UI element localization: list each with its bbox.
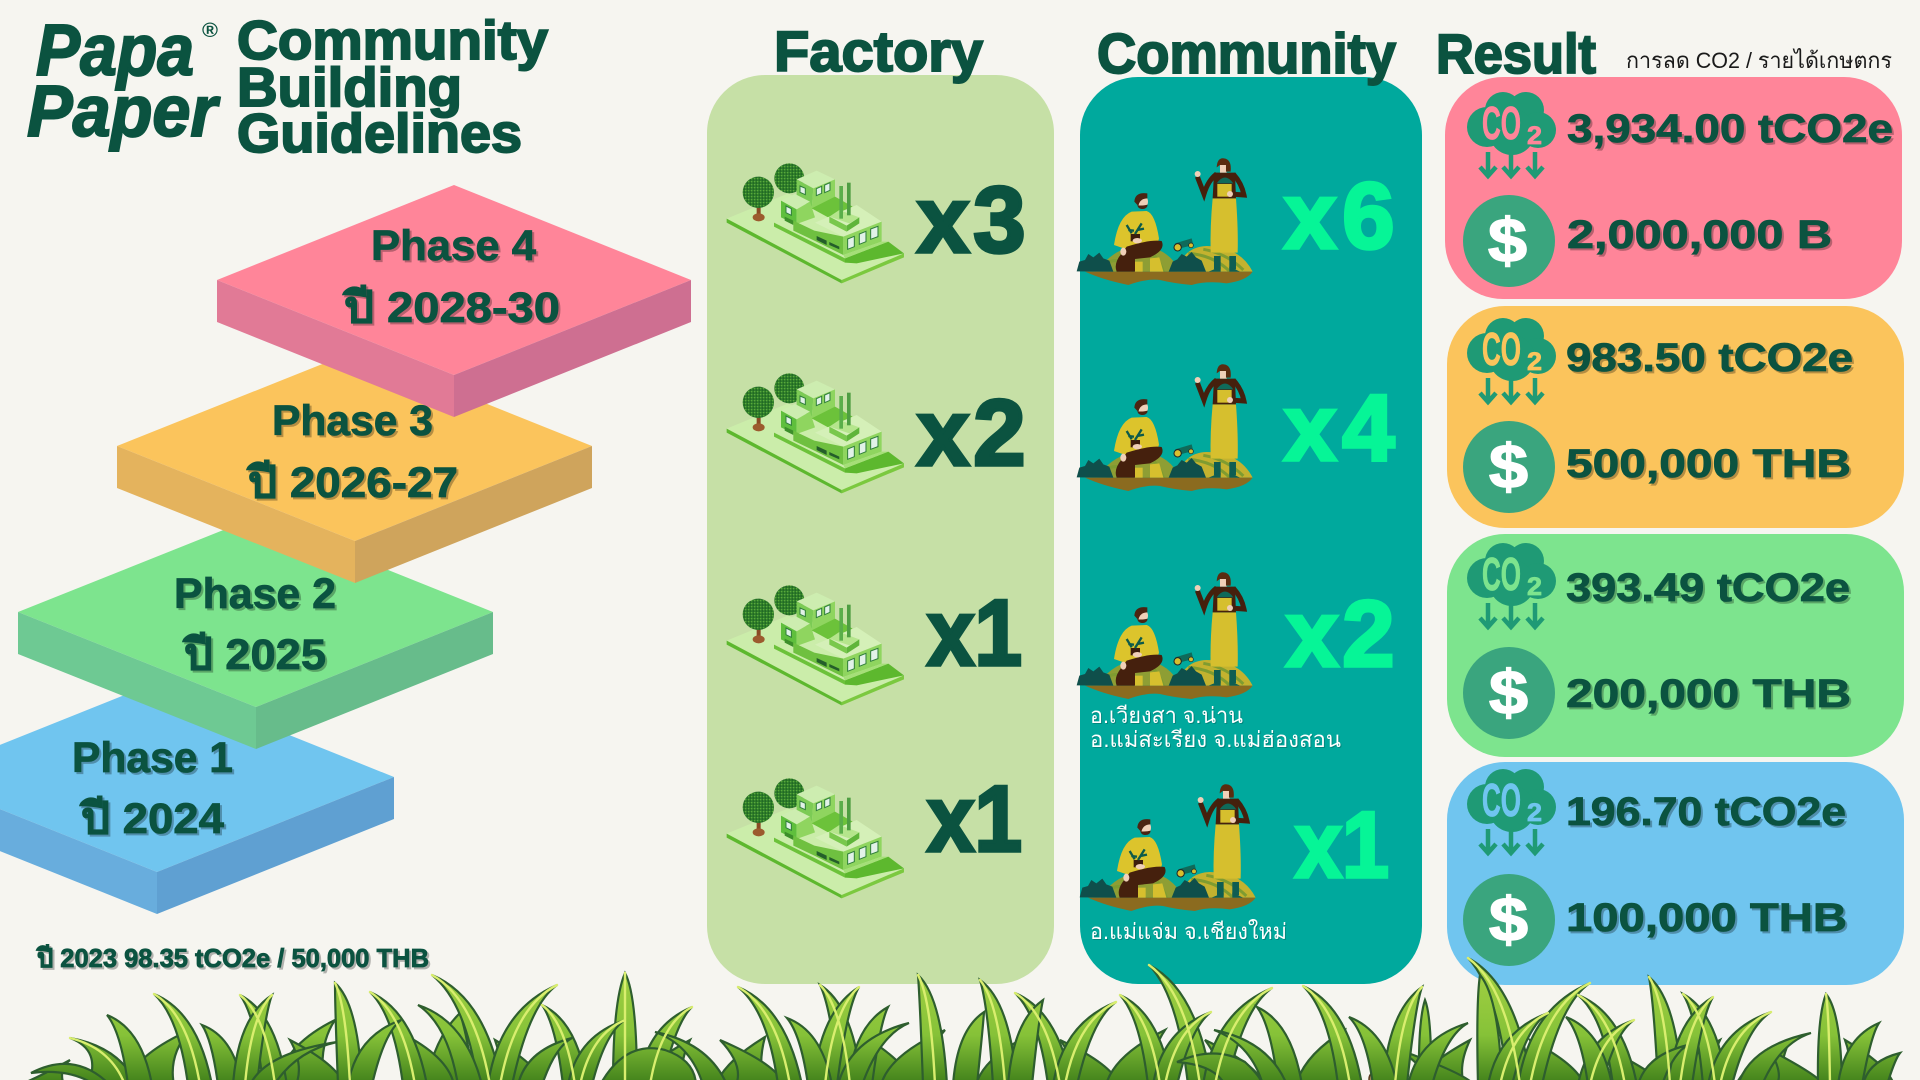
panel: factory [707, 75, 1054, 984]
icon: dollar coin: $ [1489, 886, 1528, 955]
logo: Papa Paper [27, 11, 221, 152]
community multiplier x2: x2 [1286, 581, 1399, 686]
location label row 4: อ.แม่แจ่ม จ.เชียงใหม่ [1090, 919, 1287, 944]
phase 1 label: ปี 2024 [79, 795, 224, 843]
icon: dollar coin: $ [1489, 659, 1528, 728]
phase 1 label [72, 734, 233, 843]
heading: Community: Community [1097, 22, 1396, 86]
heading: Result: Result [1436, 22, 1596, 85]
CO2 value: 3,934.00 tCO2e [1567, 107, 1893, 151]
phase 2 label: ปี 2025 [182, 631, 326, 679]
icon: CO2 cloud: 2 [1527, 799, 1542, 827]
title: Community Building Guidelines: Building [237, 56, 462, 118]
icon: CO2 cloud: 2 [1527, 122, 1542, 150]
factory icon row 4 [727, 778, 904, 898]
title: Community Building Guidelines [237, 9, 548, 164]
community multiplier x6: x6 [1284, 163, 1401, 268]
income value: 2,000,000 B [1567, 213, 1832, 257]
icon: dollar coin [1463, 421, 1555, 513]
icon: dollar coin [1463, 647, 1555, 739]
icon: dollar coin [1463, 195, 1555, 287]
factory multiplier x3: x3 [917, 167, 1030, 272]
CO2 value: 393.49 tCO2e [1566, 566, 1850, 610]
factory icon row 3 [727, 585, 904, 705]
farmers icon row 1 [1077, 158, 1253, 285]
subtitle: CO2 reduction / farmer income: การลด CO2 / รายได้เกษตกร [1626, 48, 1892, 73]
icon: CO2 cloud [1467, 92, 1556, 176]
community multiplier x4: x4 [1284, 375, 1401, 480]
icon: dollar coin: $ [1489, 433, 1528, 502]
logo: Papa Paper: Paper [27, 72, 221, 152]
income value: 200,000 THB [1566, 672, 1851, 716]
phase 4 label [342, 222, 560, 332]
icon: CO2 cloud [1467, 543, 1556, 627]
panel: result phase 1 [1447, 762, 1904, 985]
logo: Papa Paper: Papa [36, 11, 194, 91]
farmers icon row 4 [1080, 784, 1256, 911]
title: Community Building Guidelines: Guidelines [237, 102, 522, 164]
icon: CO2 cloud: 2 [1527, 573, 1542, 601]
baseline note 2023: ปี 2023 98.35 tCO2e / 50,000 THB [36, 943, 429, 973]
panel: result phase 2 [1447, 534, 1904, 757]
phase 4 label: Phase 4 [371, 222, 536, 270]
phase 2 block [18, 517, 493, 749]
icon: CO2 cloud [1467, 318, 1556, 402]
factory multiplier x2: x2 [917, 380, 1030, 485]
location labels row 3: อ.แม่สะเรียง จ.แม่ฮ่องสอน [1090, 727, 1341, 752]
phase 4 label: ปี 2028-30 [342, 284, 560, 332]
heading: Factory: Factory [774, 20, 983, 84]
farmers icon row 3 [1077, 572, 1253, 699]
phase 3 block [117, 351, 592, 583]
phase 2 label: Phase 2 [174, 570, 336, 618]
phase 1 block [0, 682, 394, 914]
phase 1 label: Phase 1 [72, 734, 233, 782]
phase 2 label [174, 570, 336, 679]
title: Community Building Guidelines: Community [237, 9, 548, 71]
icon: dollar coin [1463, 874, 1555, 966]
factory multiplier x1 row 4: x1 [927, 766, 1022, 871]
location labels row 3 [1090, 703, 1341, 752]
phase 3 label [246, 397, 458, 507]
grass border [16, 958, 1900, 1080]
icon: CO2 cloud: CO [1482, 323, 1521, 375]
factory icon row 1 [727, 163, 904, 283]
logo: Papa Paper: ® [202, 20, 218, 42]
icon: CO2 cloud: CO [1482, 97, 1521, 149]
phase 4 block [217, 185, 691, 417]
icon: CO2 cloud [1467, 769, 1556, 853]
CO2 value: 983.50 tCO2e [1566, 336, 1853, 380]
factory multiplier x1 row 3: x1 [927, 580, 1022, 685]
income value: 500,000 THB [1566, 442, 1851, 486]
phase 3 label: ปี 2026-27 [246, 459, 458, 507]
panel: result phase 4 [1445, 77, 1902, 299]
farmers icon row 2 [1077, 364, 1253, 491]
factory icon row 2 [727, 373, 904, 493]
panel: result phase 3 [1447, 306, 1904, 528]
community multiplier x1: x1 [1295, 792, 1389, 897]
location labels row 3: อ.เวียงสา จ.น่าน [1090, 703, 1243, 728]
panel: community [1077, 77, 1422, 984]
phase 3 label: Phase 3 [272, 397, 433, 445]
CO2 value: 196.70 tCO2e [1566, 790, 1846, 834]
icon: CO2 cloud: CO [1482, 774, 1521, 826]
icon: CO2 cloud: CO [1482, 548, 1521, 600]
income value: 100,000 THB [1566, 896, 1847, 940]
icon: dollar coin: $ [1488, 207, 1527, 276]
icon: CO2 cloud: 2 [1527, 348, 1542, 376]
